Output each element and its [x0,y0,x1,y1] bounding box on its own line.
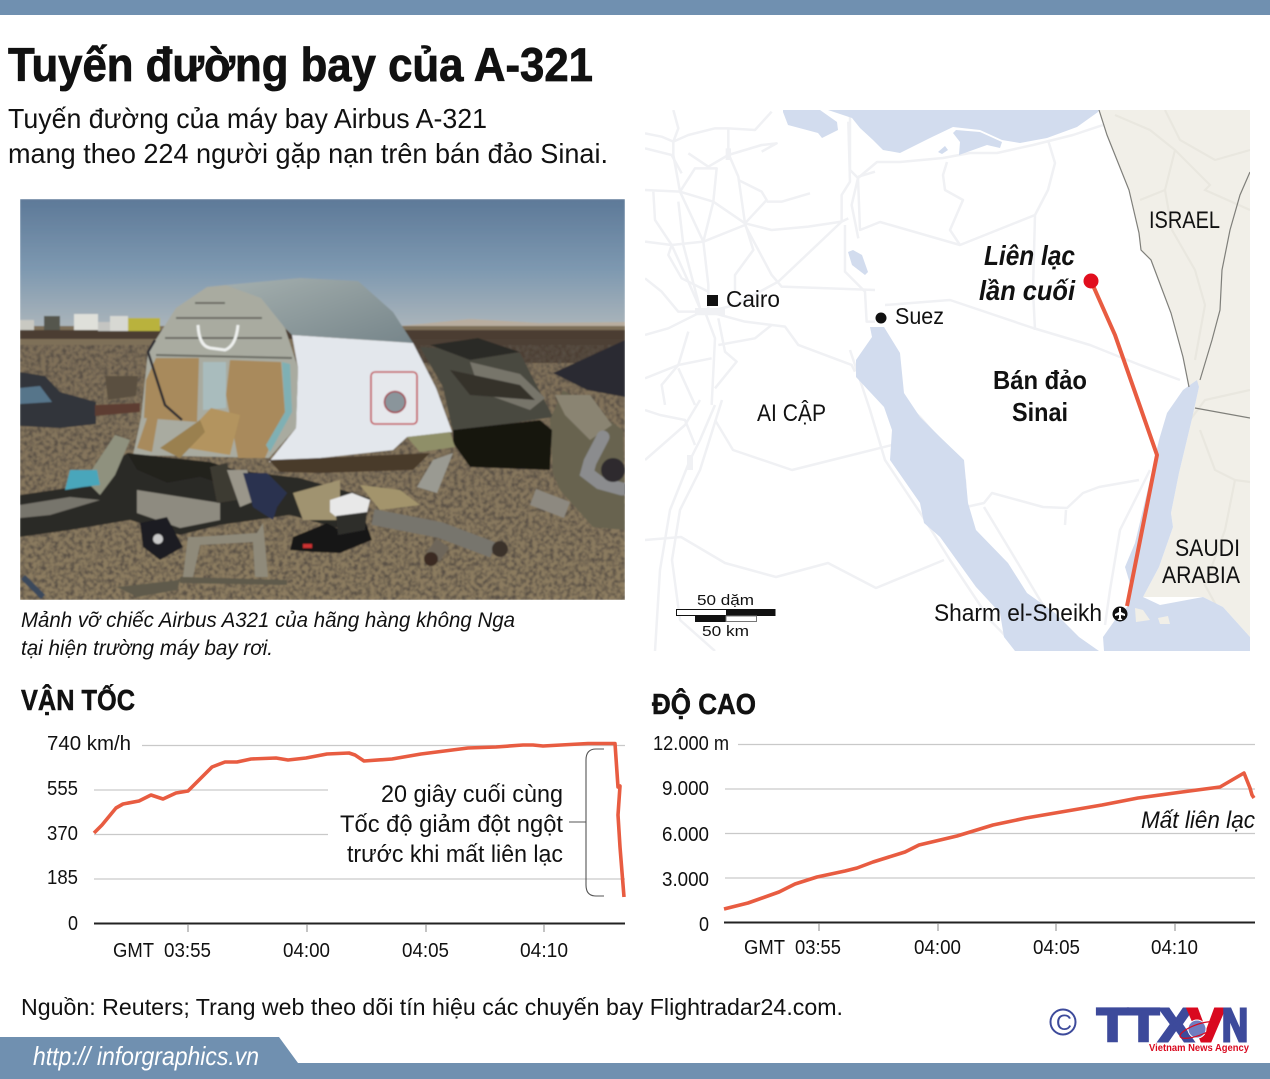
heading: altitude: ĐỘ CAO [652,687,756,721]
copyright icon [1050,1010,1076,1035]
logo: TTXVN: TTX [1097,999,1193,1051]
speed axis labels: 555 [47,778,78,800]
subtitle [8,103,608,169]
marker: last contact [1084,274,1098,288]
icon: airport [1112,606,1128,622]
footer band [0,1037,1270,1079]
altitude axis labels [653,733,1198,959]
islands [1135,608,1170,624]
altitude axis labels: 0 [699,914,709,936]
speed axis labels: GMT [113,940,154,962]
road network: Sinai and south [645,115,1180,651]
neighbouring land [1099,110,1250,637]
placard [371,372,417,424]
subtitle: mang theo 224 người gặp nạn trên bán đảo Sinai. [8,138,608,169]
label: last contact: lần cuối [979,275,1076,306]
scale bar: 50 dặm [697,592,754,609]
speed axis labels: 740 km/h [47,733,131,755]
panel: speed chart [21,683,625,962]
marker: Cairo: Cairo [726,286,780,312]
subtitle: Tuyến đường của máy bay Airbus A-321 [8,103,487,134]
borders [1099,110,1250,418]
speed axis labels: 04:10 [520,940,568,962]
copyright icon: C [1056,1010,1072,1035]
Mediterranean sea [828,110,1099,153]
pipes right [533,437,625,510]
label: Sinai peninsula: Bán đảo [993,365,1087,395]
far debris right [420,338,625,530]
altitude axis labels: 3.000 [662,869,709,891]
heading: speed: VẬN TỐC [21,683,135,717]
label: Saudi Arabia: SAUDI [1175,535,1240,562]
roads on neighbouring land [1115,110,1250,640]
scale bar: 50 km [702,623,749,640]
altitude axis labels: 6.000 [662,824,709,846]
photo caption: Mảnh vỡ chiếc Airbus A321 của hãng hàng không Nga [21,609,515,632]
footer URL: http:// inforgraphics.vn [33,1041,259,1071]
speed axis labels: 185 [47,867,78,889]
altitude axis labels: 04:10 [1151,937,1198,959]
speed line [94,744,624,897]
source note: Nguồn: Reuters; Trang web theo dõi tín hiệu các chuyến bay Flightradar24.com. [21,994,843,1020]
horizon vehicles [20,314,160,331]
road network: delta [645,110,875,405]
photo: aircraft wreckage [20,199,625,600]
marker: Suez [876,308,943,324]
label: Israel: ISRAEL [1149,207,1220,234]
panel: altitude chart [652,687,1255,959]
logo: TTXVN: Vietnam News Agency [1149,1043,1249,1054]
top band [0,0,1270,15]
altitude axis labels: 12.000 m [653,733,729,755]
speed axis labels: 04:00 [283,940,330,962]
Gulf of Aqaba [1103,380,1250,651]
logo: TTXVN [1097,999,1249,1054]
label: last contact: Liên lạc [984,240,1075,271]
altitude axis labels: GMT [744,937,785,959]
speed axis labels: 370 [47,823,78,845]
callout: final 20 seconds: trước khi mất liên lạc [347,841,563,868]
scale bar [676,594,776,636]
callout: final 20 seconds: 20 giây cuối cùng [381,781,563,808]
far debris left [20,372,140,428]
label: last contact [979,244,1076,300]
label: Saudi Arabia [1162,539,1240,583]
altitude axis labels: 04:00 [914,937,961,959]
photo caption [21,609,515,660]
logo: TTXVN: V [1188,999,1224,1051]
foreground debris [20,435,420,597]
altitude line [724,773,1254,909]
foreground pipe [373,517,508,566]
small lake [848,250,868,275]
fuselage section [133,278,455,493]
label: Sharm el-Sheikh: Sharm el-Sheikh [934,600,1102,627]
label: contact lost: Mất liên lạc [1141,807,1255,834]
logo: TTXVN: N [1222,999,1248,1051]
Gulf of Suez and Red Sea [856,327,1099,651]
bracket: final 20 seconds [569,749,604,896]
panel: map [645,110,1250,651]
label: Sinai peninsula: Sinai [1012,397,1068,427]
dark cavity [453,420,552,470]
flight route [1091,281,1157,606]
label: Sinai peninsula [994,370,1086,422]
speed axis labels: 03:55 [164,940,211,962]
callout: final 20 seconds: Tốc độ giảm đột ngột [340,811,563,838]
marker: Cairo [707,290,779,307]
altitude axis labels: 03:55 [795,937,841,959]
photo caption: tại hiện trường máy bay rơi. [21,637,273,660]
label: Saudi Arabia: ARABIA [1162,562,1240,589]
speed axis labels: 04:05 [402,940,449,962]
title: Tuyến đường bay của A-321 [8,38,593,91]
label: Egypt: AI CẬP [757,400,826,427]
altitude axis labels: 9.000 [662,778,709,800]
callout: final 20 seconds [340,781,563,868]
speed axis labels [47,733,568,962]
speed axis labels: 0 [68,913,78,935]
lagoon [938,130,1002,155]
marker: Suez: Suez [895,303,944,329]
altitude axis labels: 04:05 [1033,937,1080,959]
